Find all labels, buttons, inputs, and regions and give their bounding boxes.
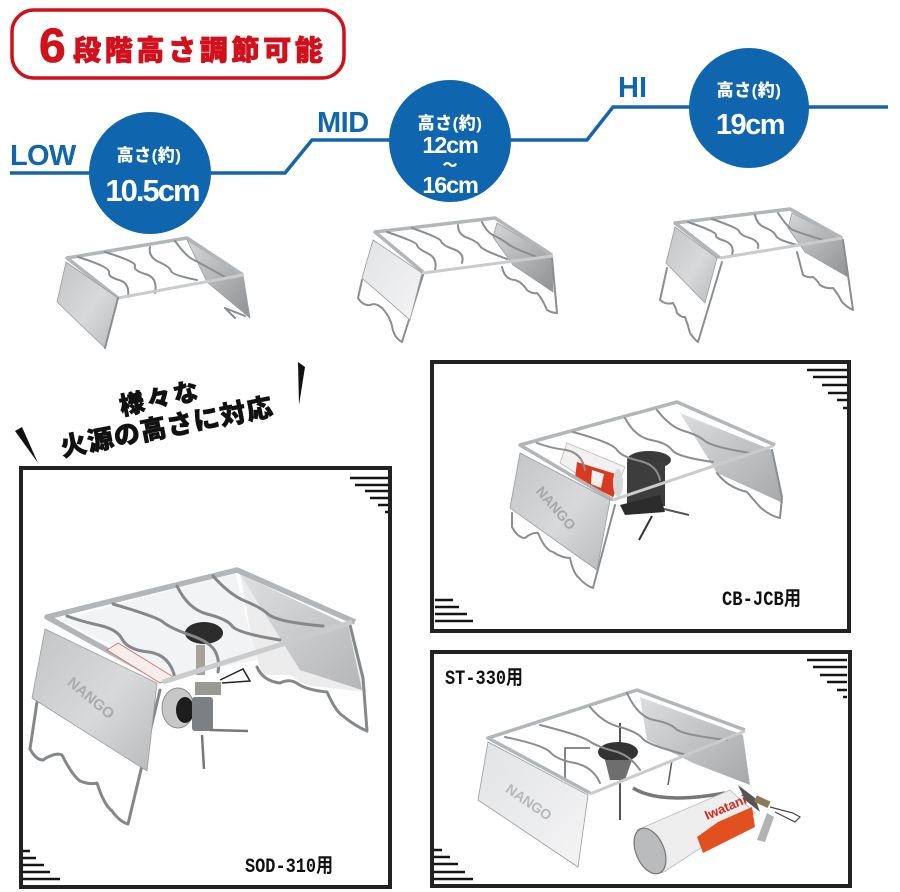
stove: frame (520, 402, 775, 500)
circle: mid height: 16cm (422, 172, 478, 198)
panel: ST-330 (432, 652, 850, 886)
stove: rear leg (257, 625, 367, 731)
accent mark: right (298, 362, 305, 405)
heading: various heat sources: 様々な (117, 377, 203, 421)
stove: mid setting (358, 218, 557, 342)
stove: gas canister (628, 785, 760, 879)
panel: SOD-310 (21, 468, 390, 887)
corner stripes (435, 370, 847, 621)
stove: burner (620, 451, 689, 540)
circle: low height: 10.5cm (105, 173, 199, 208)
circle: mid height: 12cm (422, 132, 478, 158)
stove: gas canister: Iwatani (702, 792, 749, 823)
glass reflection (60, 573, 257, 676)
stove: far panel (640, 697, 750, 785)
stove: front panel: NANGO (533, 483, 579, 533)
circle: high height (689, 48, 809, 168)
stove: gas canister (560, 443, 625, 497)
title badge (12, 10, 344, 78)
stove: front leg (30, 690, 160, 824)
height timeline line (10, 107, 888, 173)
circle: mid height (389, 80, 511, 202)
stove: frame (47, 570, 355, 681)
panel: CB-JCB (432, 362, 849, 631)
stove: front panel: NANGO (503, 780, 555, 824)
title badge: 6 (39, 20, 66, 73)
stove: far panel (240, 574, 367, 692)
title badge: 段階高さ調節可能 (73, 34, 327, 66)
circle: low height (89, 112, 211, 234)
label: SOD-310: SOD-310用 (245, 855, 333, 879)
label: ST-330: ST-330用 (445, 667, 523, 691)
stove: front panel (32, 629, 157, 771)
stove: front leg (512, 505, 615, 588)
label: MID: MID (317, 107, 369, 139)
accent mark: left (15, 427, 38, 463)
circle: high height: 高さ(約) (717, 80, 781, 100)
heading: various heat sources: 火源の高さに対応 (58, 392, 276, 462)
stove: burner (185, 622, 223, 675)
stove: front panel (510, 453, 610, 570)
stove: burner and rods (565, 723, 725, 820)
stove: front panel (478, 742, 588, 867)
stove: valve and tag (754, 795, 800, 842)
label: LOW: LOW (10, 140, 77, 172)
stove: far panel and leg (680, 413, 783, 518)
circle: mid height: 高さ(約) (418, 113, 482, 133)
circle: mid height: 〜 (442, 157, 458, 174)
circle: low height: 高さ(約) (117, 145, 181, 165)
label: CB-JCB: CB-JCB用 (722, 588, 801, 612)
circle: high height: 19cm (716, 109, 784, 141)
stove: frame (488, 690, 745, 793)
stove: low setting (57, 238, 250, 348)
label: HI: HI (618, 72, 647, 104)
corner stripes (434, 660, 847, 879)
stove: high setting (660, 209, 853, 342)
stove: gas canister and regulator (162, 669, 250, 769)
corner stripes (23, 478, 388, 879)
stove: front panel: NANGO (64, 674, 118, 723)
